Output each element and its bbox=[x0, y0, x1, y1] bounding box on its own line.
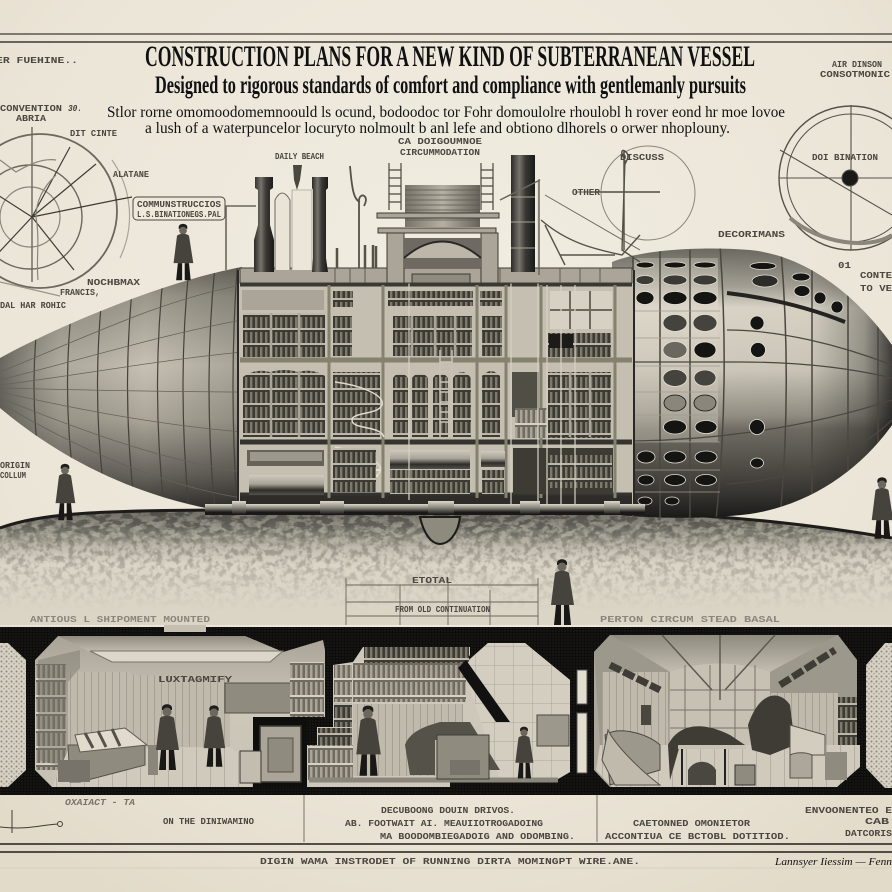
footer note: DIGIN WAMA INSTRODET OF RUNNING DIRTA MOMINGPT WIRE.ANE. bbox=[260, 857, 640, 867]
callout box: L.S.BINATIONEGS.PAL bbox=[137, 210, 221, 220]
dim labels bbox=[30, 615, 780, 625]
vertical service pipes bbox=[409, 180, 575, 505]
figure on hull bbox=[174, 224, 193, 280]
room captions: CAETONNED OMONIETOR bbox=[633, 819, 751, 829]
structural frame bbox=[240, 285, 632, 498]
diagram: top right circle bbox=[779, 105, 892, 250]
vessel bbox=[0, 155, 892, 544]
room captions: MA BOODOMBIEGADOIG AND ODOMBING. bbox=[380, 832, 575, 842]
dim labels: PERTON CIRCUM STEAD BASAL bbox=[600, 615, 780, 625]
ground mound bbox=[0, 505, 892, 625]
upper labels: CIRCUMMODATION bbox=[400, 148, 480, 158]
diagram: left compass circle bbox=[0, 127, 132, 296]
dim labels: ANTIOUS L SHIPOMENT MOUNTED bbox=[30, 615, 211, 625]
lower cross-section band bbox=[0, 625, 892, 795]
upper labels: CONSOTMONIC bbox=[820, 70, 891, 80]
left diagram labels bbox=[0, 104, 150, 311]
spiral stair bbox=[335, 382, 384, 490]
intro text: a lush of a waterpuncelor locuryto nolmoult b anl lefe and obtiono dlhorels o orwer nhoplouny. bbox=[145, 120, 730, 137]
figure left bbox=[56, 464, 75, 520]
upper labels: CA DOIGOUMNOE bbox=[398, 137, 483, 147]
room captions: ACCONTIUA CE BCTOBL DOTITIOD. bbox=[605, 832, 790, 842]
tanks bbox=[249, 450, 505, 495]
room captions: ENVOONENTEO E bbox=[805, 806, 892, 816]
dimension drawing: ETOTAL bbox=[412, 576, 452, 586]
callout box bbox=[133, 197, 256, 270]
upper labels: DOI BINATION bbox=[812, 153, 878, 163]
keel pipe bbox=[205, 501, 645, 515]
room captions: DECUBOONG DOUIN DRIVOS. bbox=[381, 806, 515, 816]
figure right bbox=[872, 477, 892, 539]
cutaway interior bbox=[238, 180, 634, 510]
left diagram labels: ABRIA bbox=[16, 114, 47, 124]
library row 2 bbox=[243, 370, 611, 438]
intro text: Stlor rorne omomoodomemnoould ls ocund, bodoodoc tor Fohr domoulolre rhoulobl h rover eond hr moe lovoe bbox=[107, 104, 785, 121]
room captions: CAB bbox=[865, 817, 890, 827]
left diagram labels: ALATANE bbox=[113, 170, 150, 180]
rigging bbox=[541, 160, 640, 265]
upper labels: OTHER bbox=[572, 188, 601, 198]
room captions: AB. FOOTWAIT AI. MEAUIIOTROGADOING bbox=[345, 819, 543, 829]
superstructure bbox=[240, 155, 640, 283]
hidden panel right bbox=[866, 643, 892, 788]
upper labels: DECORIMANS bbox=[718, 230, 786, 240]
central winch housing bbox=[377, 163, 499, 283]
hidden panel left bbox=[0, 643, 26, 787]
left diagram labels: DAL HAR ROHIC bbox=[0, 301, 67, 311]
dimension drawing bbox=[346, 576, 538, 625]
intro text bbox=[107, 104, 785, 137]
upper deck band bbox=[240, 270, 632, 329]
room 3: lounge bbox=[594, 635, 860, 787]
ladder bbox=[440, 350, 452, 437]
upper labels: TO VE bbox=[860, 284, 892, 294]
upper labels: ORIGIN bbox=[0, 461, 30, 471]
upper labels: COLLUM bbox=[0, 471, 26, 481]
room captions bbox=[0, 795, 892, 842]
upper labels: DISCUSS bbox=[620, 153, 665, 163]
diagram: centre right circle bbox=[545, 146, 695, 250]
library row 3 bbox=[247, 448, 613, 494]
stern hull right bbox=[612, 240, 892, 525]
room 1: saloon bbox=[35, 636, 325, 787]
left diagram labels: DIT CINTE bbox=[70, 129, 118, 139]
left diagram labels: 30. bbox=[68, 104, 82, 114]
room captions: ON THE DINIWAMINO bbox=[163, 817, 255, 827]
keel bulge bbox=[420, 517, 460, 544]
upper labels: DAILY BEACH bbox=[275, 152, 324, 162]
funnels left bbox=[254, 165, 328, 272]
signature: Lannsyer Iiessim — Fenn bbox=[774, 856, 892, 868]
callout box: COMMUNSTRUCCIOS bbox=[137, 200, 222, 210]
upper labels: 01 bbox=[838, 261, 852, 271]
small plaque bbox=[164, 625, 206, 632]
left diagram labels: FRANCIS, bbox=[60, 288, 100, 298]
room 1: saloon: LUXTAGMIFY bbox=[158, 675, 233, 685]
main funnel bbox=[500, 155, 540, 275]
upper labels: CONTE bbox=[860, 271, 892, 281]
deck rail bbox=[240, 268, 632, 283]
library row 1 bbox=[243, 313, 611, 357]
periscope bbox=[337, 166, 376, 268]
upper labels bbox=[0, 60, 892, 481]
left diagram labels: CONVENTION bbox=[0, 104, 62, 114]
room captions: DATCORIS bbox=[845, 829, 892, 839]
left diagram labels: NOCHBMAX bbox=[87, 278, 141, 288]
bow hull left bbox=[0, 256, 242, 522]
dimension drawing: FROM OLD CONTINUATION bbox=[395, 605, 490, 615]
figure on ground bbox=[551, 559, 574, 625]
small windows bbox=[577, 670, 587, 773]
portholes bbox=[636, 262, 843, 505]
room 2: study bbox=[307, 643, 570, 787]
room captions: OXAIACT - TA bbox=[65, 798, 135, 808]
upper labels: AIR DINSON bbox=[832, 60, 882, 70]
